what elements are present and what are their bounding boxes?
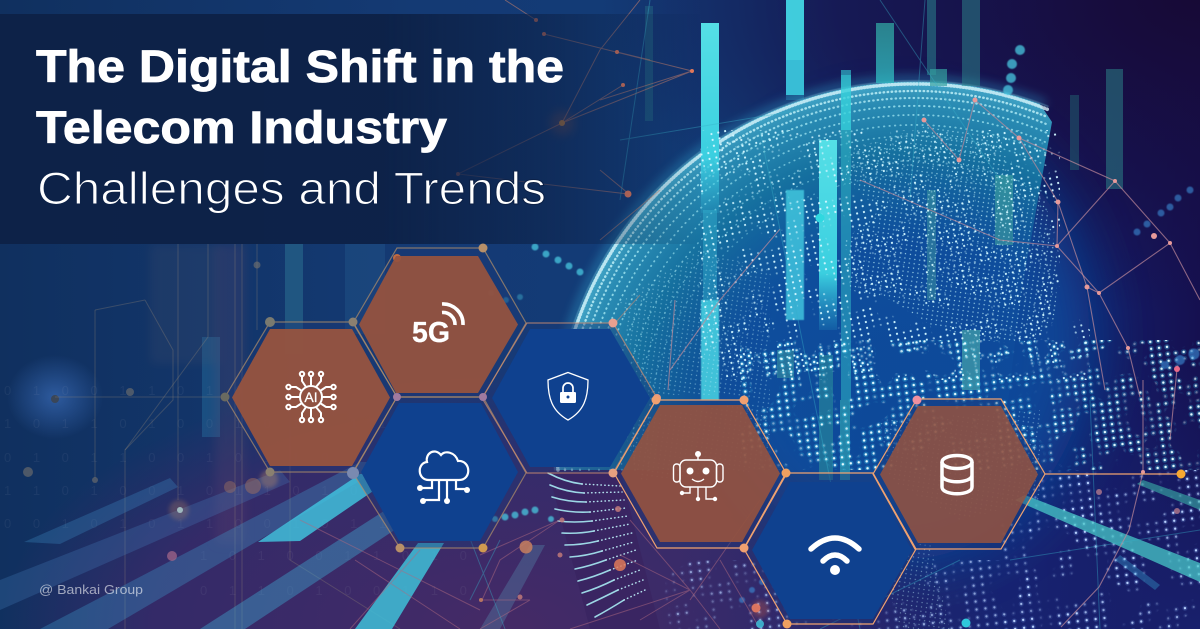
title panel [0, 14, 700, 244]
hexagon outlines and nodes [220, 244, 1186, 628]
globe body [548, 80, 1090, 629]
subtitle: challenges and trends: Challenges and Trends [37, 163, 546, 214]
floating blue bead chains [488, 45, 1200, 603]
icon: security shield [548, 372, 588, 420]
hexagon: robot [621, 405, 780, 542]
hexagon: AI [232, 329, 390, 466]
hexagon: cloud [361, 403, 518, 541]
hexagon halo layer [225, 248, 1045, 624]
hexagon: database [880, 406, 1038, 543]
vertical data bars [645, 0, 1123, 480]
binary digit texture: 1 1 0 1 0 0 1 0 1 1 0 1 0 0 1 0 [4, 483, 453, 498]
icon: 5G signal [412, 304, 463, 349]
hexagon: 5G [359, 256, 518, 393]
right side teal beams [1015, 480, 1200, 590]
globe bright continent dot clusters [700, 130, 1200, 470]
globe lower rib band [548, 473, 645, 617]
binary digit texture: 0 1 1 0 1 0 0 1 1 0 [200, 583, 476, 598]
binary digit texture: 0 1 0 1 1 0 0 1 0 1 1 0 0 1 0 1 [4, 450, 453, 465]
icon: wifi [811, 538, 859, 575]
left circuit backdrop with light columns [4, 244, 476, 629]
icon: 5G signal: 5G [412, 317, 450, 349]
diagonal light beams [0, 462, 545, 629]
title: line one: The Digital Shift in the [36, 41, 564, 92]
icon: robot [674, 451, 723, 501]
icon: cloud network [417, 451, 470, 504]
hexagon: security [492, 329, 650, 467]
globe fine lattice landmass [620, 125, 1058, 629]
binary digit texture: 1 0 1 1 0 1 0 0 1 0 1 0 1 1 0 [4, 416, 424, 431]
title: line two: Telecom Industry [36, 102, 447, 153]
binary digit texture [4, 383, 476, 598]
hexagon: wifi [752, 482, 912, 619]
icon: database [942, 456, 972, 494]
icon: AI chip [286, 372, 336, 422]
globe dotted latitude arcs [554, 81, 1048, 470]
binary digit texture: 1 0 1 0 0 1 1 0 1 0 [200, 548, 476, 563]
globe violet continent dot clusters [660, 470, 1200, 629]
binary digit texture: 0 0 1 0 1 0 1 1 0 0 1 0 1 1 0 1 [4, 516, 453, 531]
binary digit texture: 0 1 0 0 1 1 0 1 0 1 1 0 1 [4, 383, 366, 398]
watermark: @ Bankai Group [39, 582, 143, 597]
icon: AI chip: AI [304, 389, 318, 405]
